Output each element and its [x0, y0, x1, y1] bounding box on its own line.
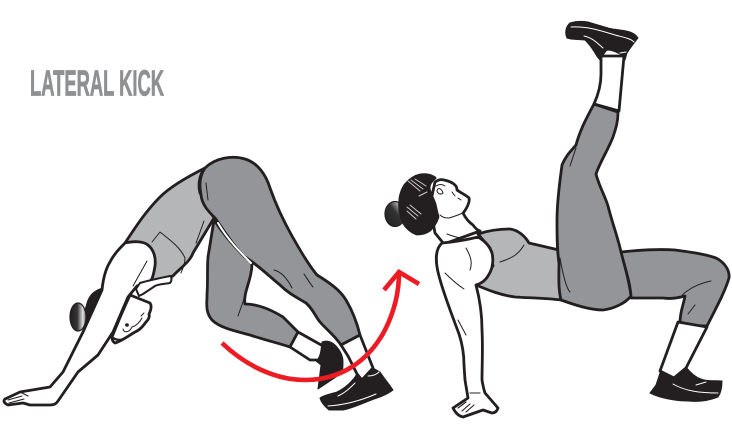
shoe highlights: [571, 27, 718, 393]
finger lines: [8, 392, 28, 403]
front leg: [200, 157, 360, 345]
raised leg: [557, 104, 631, 310]
torso: [125, 168, 214, 282]
raised sock: [594, 56, 624, 111]
white thigh highlight: [218, 223, 251, 263]
finger lines: [458, 393, 480, 412]
back leg: [207, 220, 298, 347]
torso: [476, 229, 561, 300]
hair highlights: [407, 179, 427, 219]
shoulder creases: [445, 245, 524, 335]
bent thigh and calf: [621, 250, 729, 326]
sleeve band: [136, 276, 172, 296]
body creases: [133, 183, 313, 316]
title: LATERAL KICK: [30, 62, 164, 104]
red motion arrow: [222, 272, 419, 380]
bun: [385, 202, 405, 226]
hair and bun: [70, 289, 106, 331]
head: [112, 295, 151, 343]
raised shoe: [566, 21, 638, 60]
face details: [113, 313, 144, 340]
hair: [400, 175, 438, 234]
raised leg creases: [560, 148, 711, 314]
standing shoe: [650, 367, 722, 401]
back sock: [290, 332, 323, 360]
arm and hand: [436, 237, 498, 417]
shoe highlights: [328, 372, 379, 406]
lower leg sock: [660, 322, 707, 378]
front shoe: [320, 368, 393, 410]
back shoe: [316, 341, 343, 389]
figure: bridge pose with raised leg: [385, 21, 729, 417]
face details: [436, 184, 463, 238]
arm and hand: [4, 242, 155, 405]
face and neck: [430, 180, 480, 244]
front sock: [341, 335, 373, 380]
figure: downward dog pose: [4, 157, 393, 410]
